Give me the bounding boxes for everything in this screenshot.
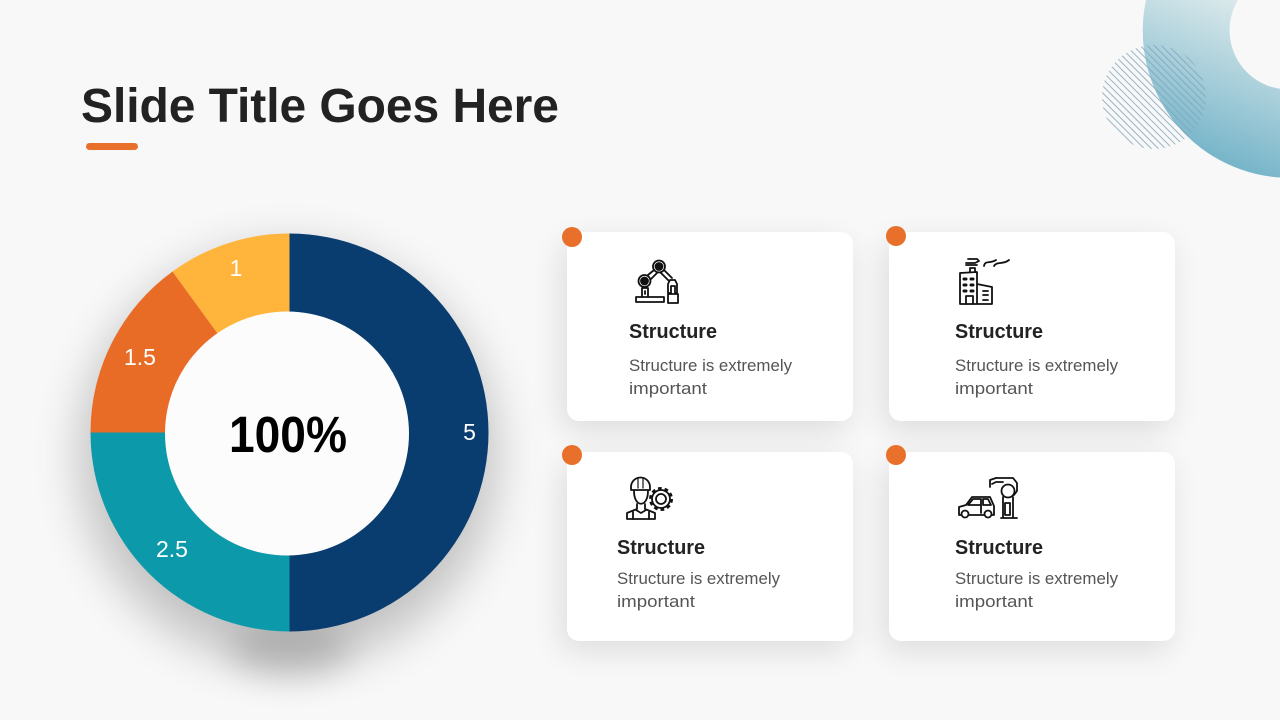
card background	[567, 232, 853, 421]
donut chart	[80, 234, 496, 676]
card text: Structure is extremely	[629, 357, 793, 375]
card: top right: important	[955, 380, 1033, 398]
card text: Structure is extremely	[955, 570, 1119, 588]
card heading: Structure	[629, 321, 717, 343]
card: bottom left	[562, 445, 853, 651]
label: 5: 5	[463, 419, 476, 445]
label: 1: 1	[230, 255, 242, 281]
marker dot	[562, 445, 582, 465]
label: 2.5: 2.5	[156, 536, 188, 562]
card heading: Structure	[617, 537, 705, 559]
icon: factory	[960, 259, 1009, 304]
card: top left	[562, 227, 853, 431]
card: bottom right: important	[955, 593, 1033, 611]
card shadow	[884, 242, 1170, 431]
card shadow	[562, 462, 848, 651]
marker dot	[886, 226, 906, 246]
segment: 2.5	[90, 432, 290, 632]
icon: robot arm	[636, 260, 678, 303]
segment: 1.5	[90, 272, 289, 432]
decorative hatched circle	[1102, 45, 1206, 149]
chart shadow	[80, 248, 496, 676]
card background	[889, 452, 1175, 641]
decorative teal ring	[1143, 0, 1280, 178]
card: top left: important	[629, 380, 707, 398]
card heading: Structure	[955, 537, 1043, 559]
card shadow	[884, 462, 1170, 651]
card text: Structure is extremely	[617, 570, 781, 588]
icon: engineer with gear	[627, 478, 672, 519]
donut hole	[165, 312, 409, 556]
card text: Structure is extremely	[955, 357, 1119, 375]
title: Slide Title Goes Here	[81, 80, 559, 133]
card: top right	[884, 226, 1175, 431]
centre value: 100%	[229, 406, 347, 463]
title underline	[86, 143, 138, 150]
marker dot	[562, 227, 582, 247]
card shadow	[562, 242, 848, 431]
icon: car and robot arm	[959, 478, 1017, 518]
label: 1.5: 1.5	[124, 344, 156, 370]
card heading: Structure	[955, 321, 1043, 343]
card background	[567, 452, 853, 641]
marker dot	[886, 445, 906, 465]
segment: 5	[290, 234, 488, 632]
card: bottom left: important	[617, 593, 695, 611]
segment: 1	[172, 234, 290, 432]
card background	[889, 232, 1175, 421]
card: bottom right	[884, 445, 1175, 651]
